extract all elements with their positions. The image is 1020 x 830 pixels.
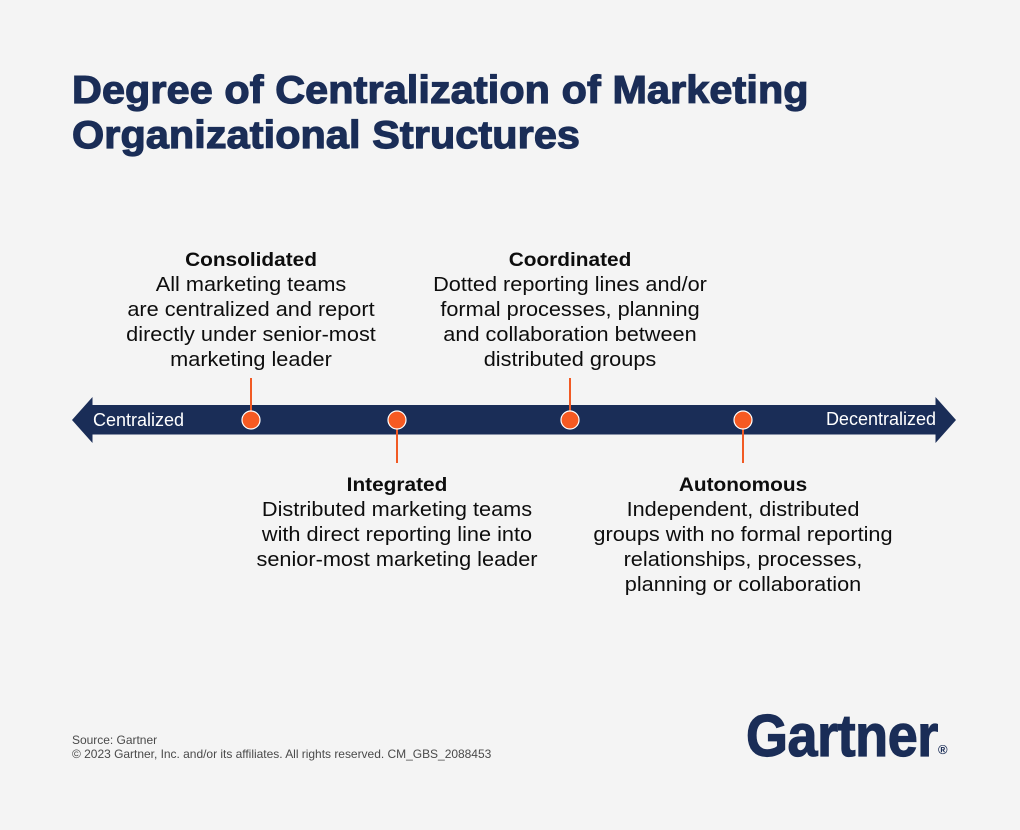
text block: Integrated: Distributed marketing teams — [262, 499, 532, 521]
text block: Integrated: senior-most marketing leader — [256, 549, 538, 571]
axis label: Centralized: Centralized — [93, 410, 184, 430]
title: Degree of Centralization of Marketing — [72, 69, 809, 112]
text block: Consolidated: All marketing teams — [156, 274, 346, 296]
text block: Integrated — [256, 475, 538, 571]
text block: Autonomous: planning or collaboration — [625, 574, 861, 596]
text block: Autonomous: relationships, processes, — [624, 549, 862, 571]
source note: Source: Gartner — [72, 733, 157, 747]
source note — [72, 733, 491, 761]
text block: Consolidated: Consolidated — [185, 250, 317, 271]
marker: Coordinated — [561, 378, 579, 429]
text block: Autonomous: Autonomous — [679, 475, 807, 496]
title — [72, 69, 809, 157]
text block: Autonomous — [593, 475, 893, 596]
text block: Autonomous: groups with no formal reporting — [593, 524, 893, 546]
text block: Integrated: Integrated — [347, 475, 447, 496]
text block: Coordinated: and collaboration between — [443, 324, 697, 346]
text block: Autonomous: Independent, distributed — [627, 499, 859, 521]
title: Organizational Structures — [72, 114, 580, 156]
arrow: double-headed centralization axis — [72, 397, 956, 443]
marker: Consolidated — [242, 378, 260, 429]
marker: Integrated — [388, 411, 406, 463]
text block: Coordinated: Coordinated — [509, 250, 631, 271]
axis label: Decentralized: Decentralized — [826, 409, 936, 429]
marker: Autonomous — [734, 411, 752, 463]
text block: Coordinated: Dotted reporting lines and/or — [433, 274, 707, 296]
text block: Coordinated: formal processes, planning — [440, 299, 700, 321]
text block: Consolidated: marketing leader — [170, 349, 332, 371]
text block: Consolidated — [126, 250, 376, 371]
logo: Gartner: Gartner — [746, 703, 938, 769]
text block: Coordinated: distributed groups — [484, 349, 656, 371]
text block: Consolidated: directly under senior-most — [126, 324, 376, 346]
source note: © 2023 Gartner, Inc. and/or its affiliates. All rights reserved. CM_GBS_2088453 — [72, 747, 491, 761]
logo: Gartner: ® — [938, 742, 948, 757]
text block: Coordinated — [433, 250, 707, 371]
text block: Consolidated: are centralized and report — [127, 299, 375, 321]
text block: Integrated: with direct reporting line into — [262, 524, 532, 546]
